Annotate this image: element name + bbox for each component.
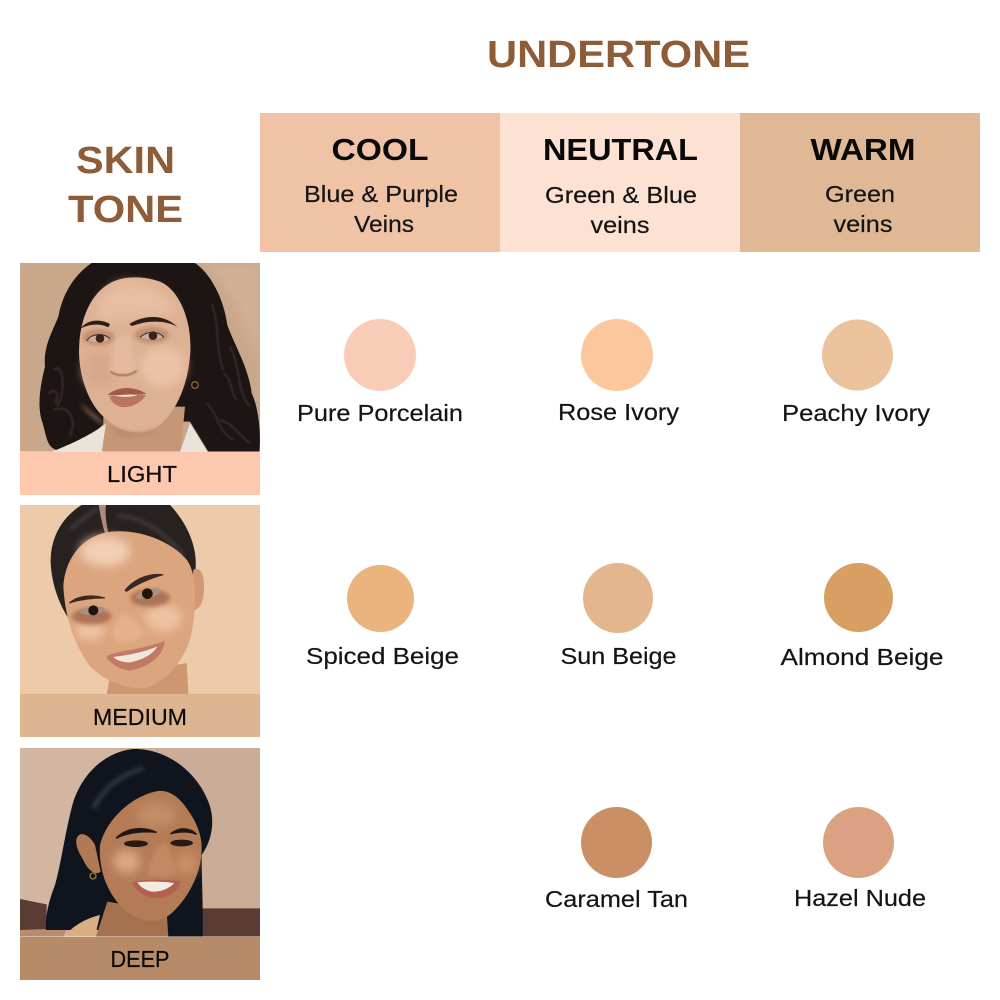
neck and collar: [103, 407, 185, 452]
hair: [46, 749, 212, 937]
row: medium portrait: [20, 503, 260, 737]
column header: warm: Green: [825, 181, 895, 207]
swatch: pure porcelain: [297, 319, 463, 426]
eyebrows: [69, 596, 105, 603]
photo: deep skin woman: [20, 745, 260, 938]
row: deep portrait: [20, 745, 260, 980]
label: light: [20, 452, 260, 495]
face: [63, 531, 195, 688]
swatch: pure porcelain: Pure Porcelain: [297, 400, 463, 426]
column header: neutral: Green & Blue: [545, 182, 697, 208]
column header: neutral: [500, 113, 740, 252]
swatch: sun beige: [560, 563, 676, 669]
face: [79, 277, 191, 433]
neck: [96, 902, 168, 937]
eyebrows: [116, 829, 157, 838]
column header: neutral: NEUTRAL: [543, 132, 698, 167]
eye shadows: [82, 329, 114, 345]
label: deep: [20, 937, 260, 980]
label: medium: [20, 694, 260, 737]
label: medium: MEDIUM: [93, 704, 187, 730]
swatch: almond beige: [780, 563, 944, 670]
eyes: [88, 335, 108, 342]
heading: skin tone: [68, 140, 183, 231]
neck: [107, 663, 188, 694]
earring: [192, 382, 198, 388]
ear: [192, 568, 204, 610]
column header: warm: WARM: [810, 132, 916, 167]
swatch: spiced beige: [306, 565, 459, 669]
label: deep: DEEP: [110, 946, 170, 972]
swatch: caramel tan: Caramel Tan: [545, 886, 688, 912]
column header: neutral: veins: [590, 212, 650, 238]
column header: cool: Veins: [354, 211, 414, 237]
face: [100, 791, 202, 921]
label: light: LIGHT: [107, 461, 177, 487]
swatch: caramel tan: [545, 807, 688, 912]
title: undertone: UNDERTONE: [487, 34, 750, 76]
ear: [76, 834, 101, 873]
column header: warm: veins: [834, 211, 892, 237]
swatch: hazel nude: [794, 807, 926, 911]
eyes: [80, 606, 106, 615]
hair: [39, 263, 260, 452]
eyes: [124, 840, 148, 847]
eyebrows: [81, 321, 110, 328]
photo: light skin woman: [20, 260, 260, 453]
lips: [107, 388, 147, 395]
mouth: [106, 641, 165, 671]
swatch: almond beige: Almond Beige: [780, 644, 944, 670]
column header: cool: COOL: [332, 132, 428, 167]
swatch: rose ivory: Rose Ivory: [558, 399, 680, 425]
column header: cool: [260, 113, 500, 252]
column header: warm: [740, 113, 980, 252]
hair: [51, 505, 196, 618]
row: light portrait: [20, 260, 260, 495]
sofa: [20, 899, 260, 937]
swatch: peachy ivory: Peachy Ivory: [782, 400, 931, 426]
mouth: [132, 880, 181, 898]
swatch: hazel nude: Hazel Nude: [794, 885, 926, 911]
swatch: sun beige: Sun Beige: [560, 643, 676, 669]
swatch: rose ivory: [558, 319, 680, 425]
photo: medium skin woman: [20, 503, 260, 696]
heading: skin tone: TONE: [68, 189, 183, 231]
clothes: [64, 915, 100, 937]
column header: cool: Blue & Purple: [304, 181, 458, 207]
swatch: spiced beige: Spiced Beige: [306, 643, 459, 669]
heading: skin tone: SKIN: [76, 140, 175, 182]
swatch: peachy ivory: [782, 320, 931, 426]
